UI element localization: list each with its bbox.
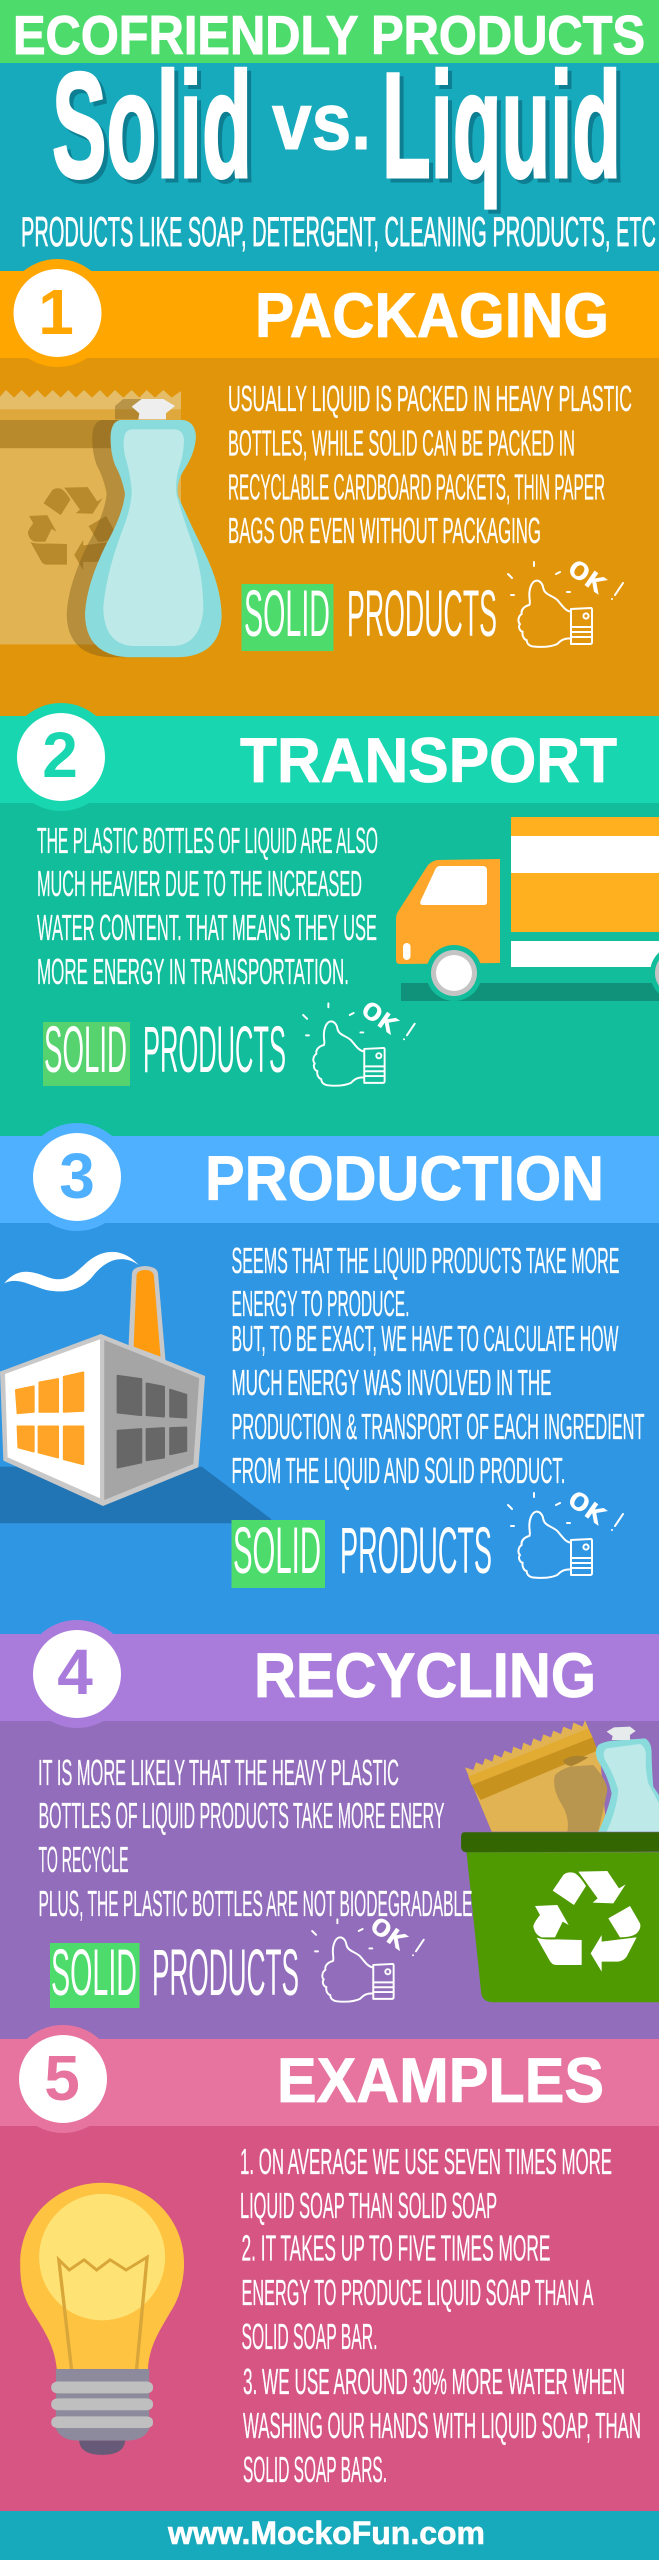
heading: packaging: PACKAGING [255, 281, 609, 351]
icon: paper bag and bottle [0, 390, 222, 657]
icon: recycling bin [461, 1720, 659, 2002]
body text [228, 378, 632, 551]
body text: ENERGY TO PRODUCE. [232, 1283, 410, 1324]
panel: examples [0, 2025, 659, 2511]
title: Solid: Solid [52, 41, 252, 209]
body text: SOLID SOAP BARS. [243, 2449, 387, 2490]
heading: transport: TRANSPORT [240, 726, 617, 796]
badge 4 [23, 1620, 131, 1728]
heading: examples: EXAMPLES [277, 2046, 604, 2116]
verdict: solid products: SOLID [44, 1012, 127, 1086]
icon: light bulb [20, 2183, 184, 2455]
body text [38, 1752, 472, 1924]
icon: thumbs up ok: OK [563, 1485, 612, 1531]
body text [232, 1240, 645, 1491]
badge 3: 3 [59, 1140, 95, 1212]
badge 1: 1 [38, 276, 74, 348]
icon: thumbs up ok: OK [356, 996, 403, 1040]
icon: factory [0, 1252, 271, 1523]
heading: production: PRODUCTION [205, 1144, 604, 1214]
panel: recycling: PRODUCTS [152, 1935, 299, 2009]
icon: thumbs up ok [312, 1912, 424, 2002]
verdict: solid products: SOLID [51, 1935, 137, 2009]
icon: thumbs up ok [508, 1485, 623, 1578]
title panel [0, 41, 659, 271]
verdict: solid products: SOLID [244, 576, 330, 650]
panel: packaging [0, 259, 659, 716]
icon: thumbs up ok: OK [365, 1912, 412, 1956]
panel: production [0, 1123, 659, 1634]
verdict: solid products: SOLID [233, 1513, 321, 1587]
title: vs.: vs. [272, 77, 371, 167]
icon: delivery truck [396, 817, 659, 1001]
badge 2 [7, 703, 115, 811]
panel: recycling [0, 1620, 659, 2039]
body text [240, 2141, 641, 2490]
badge 3 [23, 1123, 131, 1231]
body text: SOLID SOAP BAR. [242, 2316, 378, 2357]
panel: transport [0, 703, 659, 1136]
body text: TO RECYCLE [38, 1839, 128, 1880]
badge 1 [4, 259, 112, 367]
footer url: www.MockoFun.com [167, 2515, 485, 2551]
icon: thumbs up ok [303, 996, 415, 1086]
footer [0, 2511, 659, 2560]
body text [37, 820, 378, 992]
top banner [0, 0, 659, 66]
badge 2: 2 [42, 719, 78, 791]
badge 4: 4 [57, 1636, 93, 1708]
icon: thumbs up ok: OK [563, 554, 612, 600]
icon: thumbs up ok [508, 554, 623, 647]
badge 5: 5 [44, 2042, 80, 2114]
badge 5 [9, 2025, 117, 2133]
heading: recycling: RECYCLING [254, 1641, 596, 1711]
panel: transport: PRODUCTS [143, 1012, 286, 1086]
